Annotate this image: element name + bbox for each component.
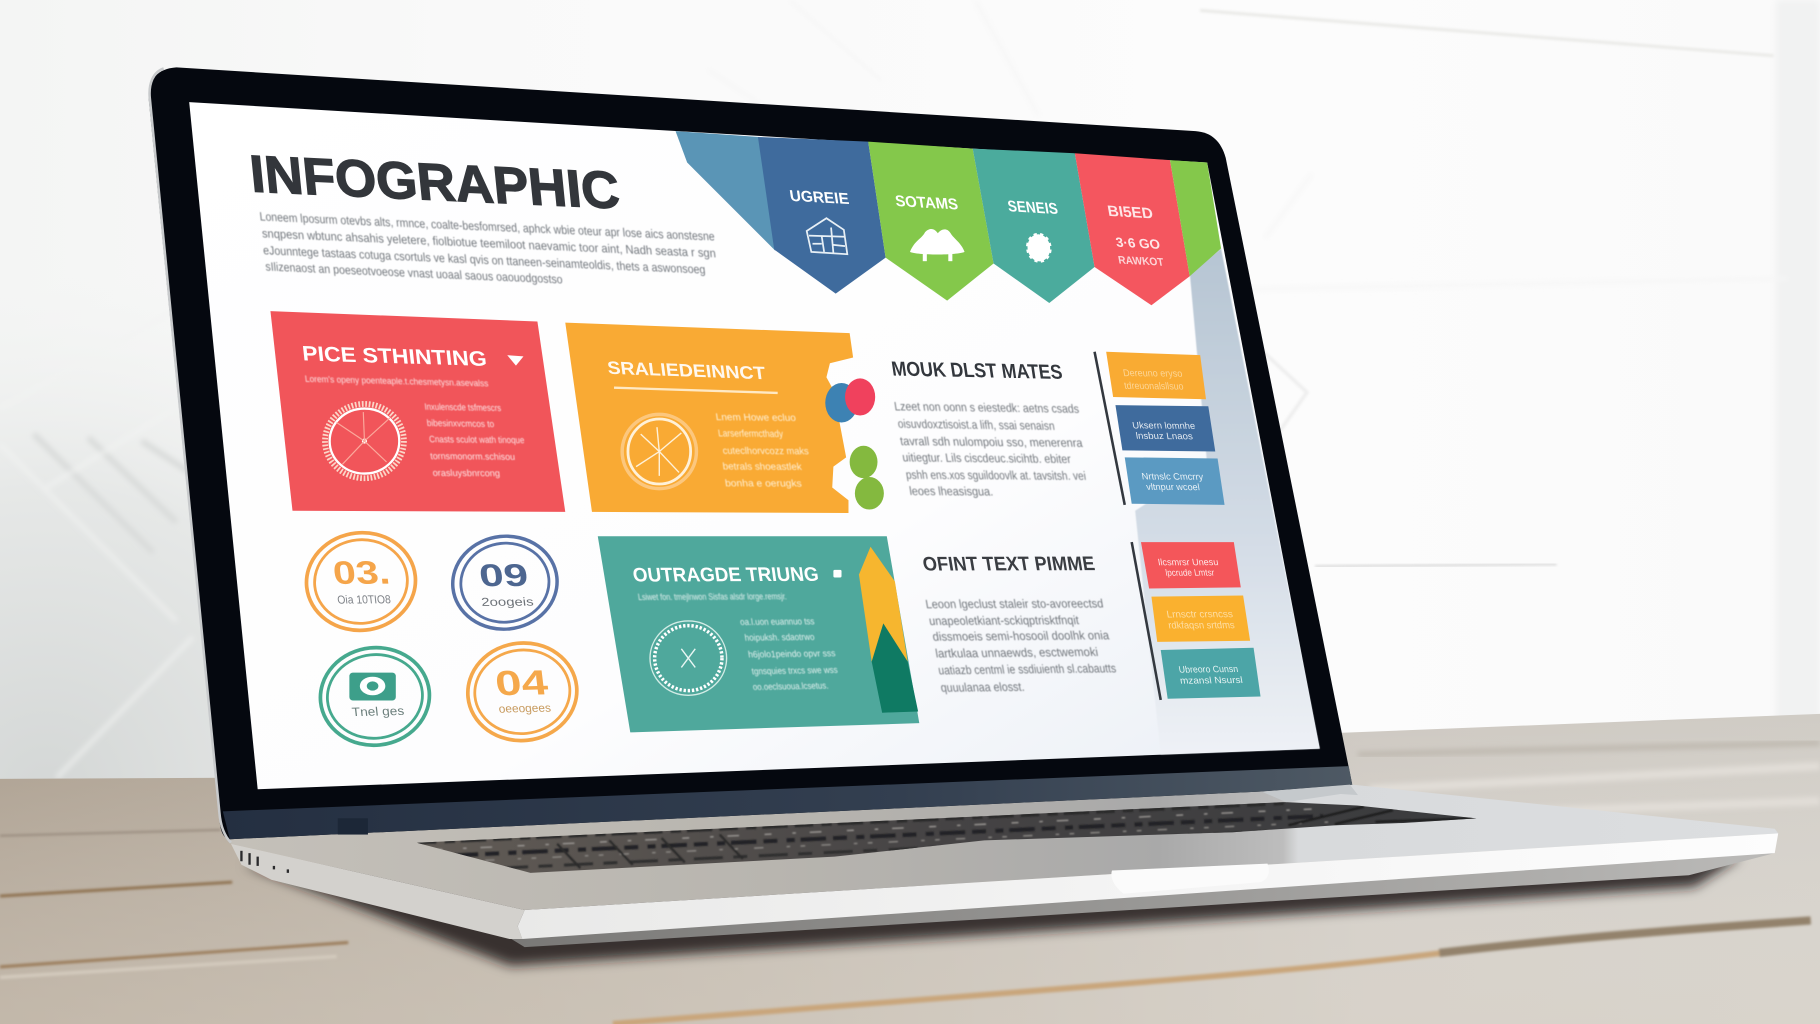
chevron: red — [1075, 153, 1190, 305]
chevron: green — [868, 142, 994, 301]
paragraph: uatiazb centml ie ssdiuienth sl.cabautts — [937, 661, 1117, 677]
tag: light blue: Nrtnslc Cmcrry — [1141, 471, 1204, 482]
paragraph: lartkulaa unnaewds, esctwemoki — [934, 645, 1099, 661]
card body text: Inxulenscde tsfmescrs — [424, 402, 502, 413]
paragraph: oisuvdoxztisoist.a lifh, ssai senaisn — [897, 417, 1056, 433]
dropdown arrow — [507, 355, 523, 366]
icon: wheel — [622, 414, 696, 489]
tag: orange: Dereuno eryso — [1122, 368, 1184, 380]
stat badge: 04 — [463, 638, 582, 746]
heading: MOUK DLST MATES — [890, 359, 1064, 384]
top chevron ribbon — [676, 131, 1221, 305]
panel: teal card — [598, 536, 919, 732]
text block: mouk dlst mates — [890, 359, 1087, 499]
lid silver edge — [150, 68, 231, 843]
paragraph: leoes lheasisgua. — [908, 484, 994, 499]
intro paragraph: sIlizenaost an poeseotvoeose vnast uoaal saous oaouodgostso — [265, 259, 563, 287]
wall background — [0, 0, 1820, 813]
card body text: Larserfermcthady — [717, 428, 784, 440]
card body text: bonha e oerugks — [724, 478, 803, 490]
base underside — [272, 853, 1775, 947]
keyboard — [417, 802, 1476, 873]
tag: orange: Lrnsctr crsncss — [1166, 609, 1234, 620]
card body text: betrals shoeastlek — [722, 462, 803, 473]
paragraph: pshh ens.xos sguildoovlk at. tavsitsh. vei — [905, 468, 1087, 483]
tag: blue — [1115, 405, 1215, 452]
card body text: tgnsquies trxcs swe wss — [751, 665, 839, 676]
side gradient panel — [1135, 248, 1320, 754]
marker — [833, 570, 842, 577]
subheading: Lorem's openy poenteaple.t.chesmetysn.asevalss — [304, 374, 489, 388]
stat badge: 04: oeeogees — [498, 702, 552, 716]
divider — [1132, 542, 1161, 700]
tag: orange — [1151, 595, 1250, 642]
tag: blue: lnsbuz Lnaos — [1135, 431, 1194, 441]
card body text: Cnasts sculot wath tinoque — [429, 434, 525, 445]
paragraph: uitiegtur. Lils ciscdeuc.sicihtb. ebiter — [901, 450, 1072, 466]
laptop shadow on table — [244, 857, 1741, 966]
tag: teal: mzansl Nsursl — [1179, 675, 1243, 686]
stat badge: 09: 2oogeis — [481, 596, 535, 609]
dots: green pair — [850, 446, 884, 510]
icon: wheel — [325, 404, 404, 478]
hinge band — [223, 766, 1352, 839]
chevron label: SENEIS — [1006, 198, 1059, 218]
chevron label: BI5ED — [1106, 203, 1154, 222]
tag: red: Ilcsmrsr Unesu — [1157, 557, 1219, 567]
panel: red card — [270, 311, 565, 512]
tag: red — [1141, 542, 1241, 588]
chevron label: SOTAMS — [894, 193, 959, 214]
dots: blue and red overlap — [825, 378, 875, 423]
base top deck — [230, 785, 1778, 910]
laptop — [149, 67, 1778, 947]
card body text: hoipuksh. sdaotrwo — [744, 632, 815, 643]
intro paragraph: snqpesn wbtunc ahsahis yeletere, fiolbiotue teemiloot naevamic toor aint, Nadh seasta r sgn — [261, 226, 716, 260]
card body text — [424, 402, 525, 478]
port openings — [240, 851, 289, 873]
text block: ofint text pimme — [921, 553, 1117, 695]
chevron: green end — [1170, 160, 1221, 276]
tag: teal: Ubreoro Cunsn — [1178, 664, 1239, 675]
icon: house plan — [807, 218, 847, 254]
tag: orange — [1106, 352, 1206, 399]
tag: orange: rdkfaqsn srtdms — [1167, 620, 1236, 632]
chevron sub-label: RAWKOT — [1117, 255, 1165, 269]
tag: teal — [1161, 648, 1261, 699]
icon: dial — [650, 621, 727, 695]
chevron: light blue — [676, 131, 775, 251]
stat badge: 03 — [302, 527, 420, 636]
stat badge: 04: 04 — [493, 663, 551, 703]
hinge notch — [338, 818, 368, 835]
card body text: oa.l.uon euannuo tss — [739, 616, 815, 627]
chevron: teal — [973, 149, 1095, 303]
heading: OFINT TEXT PIMME — [921, 553, 1097, 575]
chevron: blue — [758, 137, 886, 294]
paragraph: dissmoeis semi-hosooil doolhk onia — [931, 628, 1110, 644]
divider — [1095, 352, 1125, 505]
stat badge: 03: 03. — [331, 554, 392, 591]
heading: SRALIEDEINNCT — [606, 358, 767, 383]
heading underline — [614, 388, 778, 393]
lid outer bezel — [149, 67, 1352, 839]
paragraph: unapeoletkiant-sckiqptrisktfnqit — [928, 613, 1080, 628]
tag: red: lpcrude Lmtsr — [1165, 568, 1215, 578]
tag: light blue: vltnpur wcoel — [1145, 482, 1201, 492]
chevron label: UGREIE — [789, 188, 850, 208]
stat badge: teal icon: Tnel ges — [351, 704, 405, 719]
card body text: orasluysbnrcong — [432, 468, 501, 478]
tag: light blue — [1125, 457, 1225, 505]
card body text: bibesinxvcmcos to — [426, 418, 495, 429]
card body text: cuteclhorvcozz maks — [722, 446, 809, 457]
accent: yellow shape — [859, 547, 908, 662]
intro paragraph — [259, 210, 716, 287]
subheading: Lsiwet fon. tmejlnwon Sisfas alsdr lorge.remsjr. — [637, 591, 787, 602]
stat badge: teal icon — [316, 642, 434, 751]
heading: OUTRAGDE TRIUNG — [631, 564, 820, 587]
card body text — [715, 412, 809, 490]
base front lip — [518, 833, 1778, 939]
card body text: oo.oeclsuoua.lcsetus. — [752, 681, 829, 692]
stat badge: 03: Oia 10TIO8 — [337, 593, 391, 607]
right hinge plate — [1262, 785, 1358, 802]
stat badge: 09: 09 — [477, 558, 530, 593]
paragraph: quuulanaa elosst. — [939, 680, 1025, 695]
intro paragraph: Loneem lposurm otevbs alts, rmnce, coalte-besfomrsed, aphck wbie oteur apr lose aics aonstesne — [259, 210, 715, 244]
paragraph: Leoon lgeclust staleir sto-avoreectsd — [924, 597, 1104, 611]
card body text: Lnem Howe ecluo — [715, 412, 797, 424]
trackpad notch — [1111, 864, 1269, 894]
card body text — [739, 616, 839, 692]
paragraph — [893, 399, 1087, 499]
heading: PICE STHINTING — [301, 342, 488, 371]
accent: dark green shape — [872, 623, 918, 713]
tag: blue: Uksern lomnhe — [1132, 420, 1196, 431]
paragraph: tavrall sdh nulompoiu sso, menerenra — [899, 434, 1084, 450]
chevron sub-label: 3·6 GO — [1114, 235, 1161, 252]
intro paragraph: eJounntege tastaas cotuga csortuls ve kasl qvis on ttaneen-seinamteoldis, thets a aswonsoeg — [262, 243, 706, 277]
wooden table — [0, 714, 1820, 1024]
icon: cloud on stand — [910, 229, 965, 261]
icon: banknote — [349, 673, 396, 700]
laptop screen — [189, 102, 1320, 789]
panel: orange card — [565, 323, 853, 513]
paragraph: Lzeet non oonn s eiestedk: aetns csads — [893, 399, 1080, 416]
card body text: tornsmonorm.schisou — [430, 451, 516, 462]
title: INFOGRAPHIC — [247, 146, 622, 220]
paragraph — [924, 597, 1117, 695]
base left side — [231, 844, 525, 939]
icon: round badge — [1024, 231, 1054, 265]
tag: orange: tdreuonalsllsuo — [1123, 381, 1185, 393]
stat badge: 09 — [448, 531, 562, 634]
card body text: h6jolo1peindo opvr sss — [747, 648, 836, 660]
